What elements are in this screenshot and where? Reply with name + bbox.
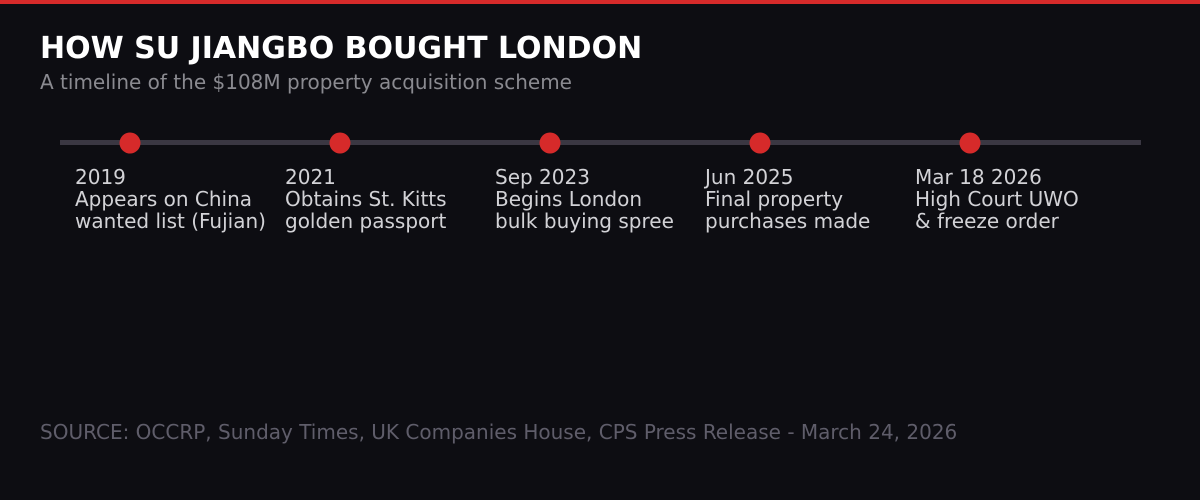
event: Sep 2023: [495, 132, 674, 233]
subtitle: A timeline of the $108M property acquisition scheme: [40, 70, 572, 94]
event: 2021: golden passport: [285, 209, 446, 233]
event: Mar 18 2026: [915, 132, 1079, 233]
event: 2019: wanted list (Fujian): [75, 209, 266, 233]
event: 2019: [75, 132, 266, 233]
event: 2019: Appears on China: [75, 187, 252, 211]
source note: SOURCE: OCCRP, Sunday Times, UK Companies House, CPS Press Release - March 24, 2026: [40, 420, 957, 444]
event: Sep 2023: Sep 2023: [495, 165, 590, 189]
timeline: [60, 132, 1141, 233]
event: Mar 18 2026: & freeze order: [915, 209, 1060, 233]
event: Jun 2025: Final property: [705, 187, 843, 211]
event: 2021: Obtains St. Kitts: [285, 187, 447, 211]
event: Mar 18 2026: Mar 18 2026: [915, 165, 1042, 189]
event: Jun 2025: Jun 2025: [703, 165, 794, 189]
event: Jun 2025: [703, 132, 870, 233]
event: 2019: 2019: [75, 165, 126, 189]
event: Sep 2023: Begins London: [495, 187, 642, 211]
event: Sep 2023: bulk buying spree: [495, 209, 674, 233]
event: Mar 18 2026: High Court UWO: [915, 187, 1079, 211]
title: HOW SU JIANGBO BOUGHT LONDON: [40, 31, 642, 66]
event: 2021: 2021: [285, 165, 336, 189]
event: 2021: [285, 132, 447, 233]
event: Jun 2025: purchases made: [705, 209, 870, 233]
